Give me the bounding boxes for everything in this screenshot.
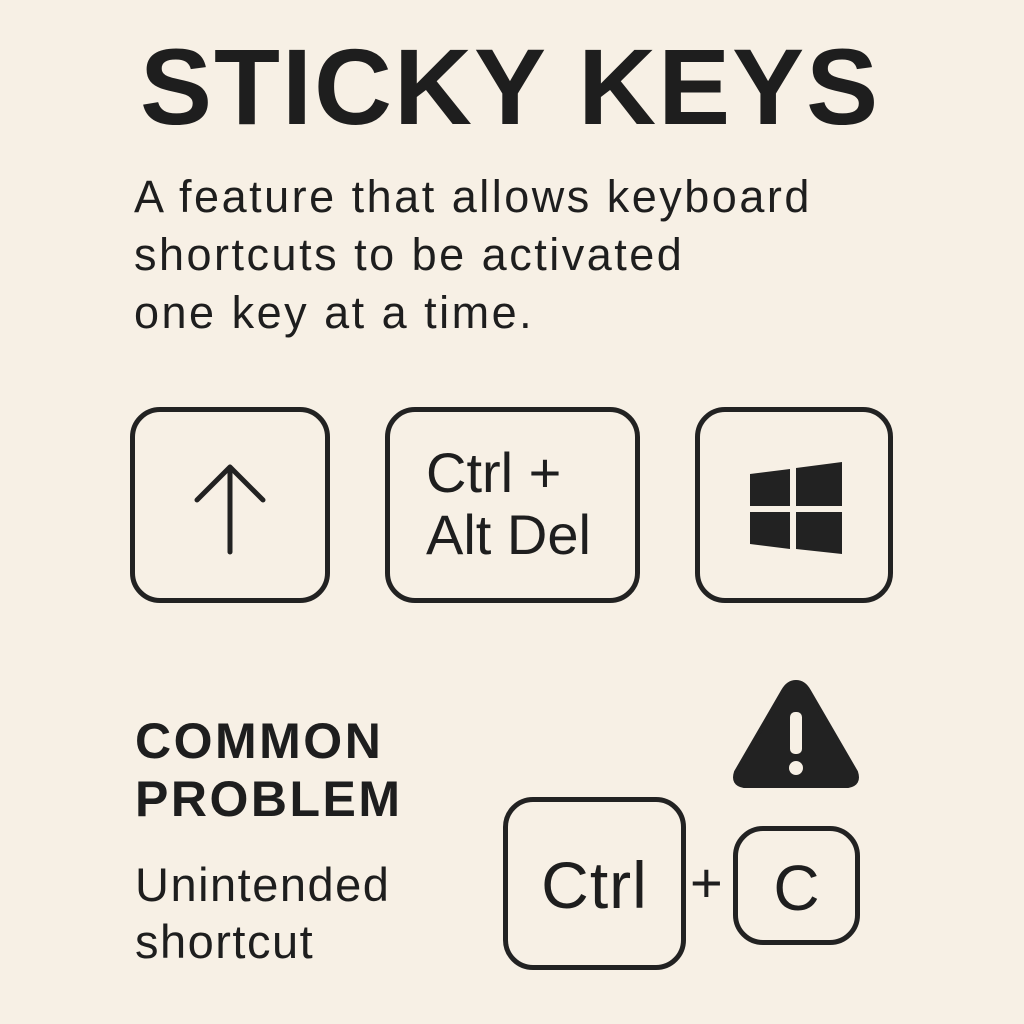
key: shift arrow bbox=[130, 407, 330, 603]
icon: warning bbox=[733, 680, 859, 788]
key: windows bbox=[695, 407, 893, 603]
key: ctrl alt del bbox=[385, 407, 640, 603]
title: STICKY KEYS bbox=[140, 26, 880, 147]
text: unintended shortcut bbox=[135, 858, 390, 968]
plus: + bbox=[690, 851, 723, 914]
heading: common problem bbox=[135, 713, 402, 827]
heading: common problem: PROBLEM bbox=[135, 771, 402, 827]
description text bbox=[134, 171, 812, 338]
key: ctrl alt del: Ctrl + bbox=[426, 441, 561, 504]
text: unintended shortcut: shortcut bbox=[135, 915, 314, 968]
key: C bbox=[733, 826, 860, 945]
description text: A feature that allows keyboard bbox=[134, 171, 812, 222]
text: unintended shortcut: Unintended bbox=[135, 858, 390, 911]
key: ctrl alt del: Alt Del bbox=[426, 503, 591, 566]
key: ctrl bbox=[503, 797, 686, 970]
key: ctrl: Ctrl bbox=[541, 848, 648, 922]
heading: common problem: COMMON bbox=[135, 713, 383, 769]
description text: one key at a time. bbox=[134, 287, 534, 338]
key: C: C bbox=[773, 852, 820, 924]
description text: shortcuts to be activated bbox=[134, 229, 684, 280]
